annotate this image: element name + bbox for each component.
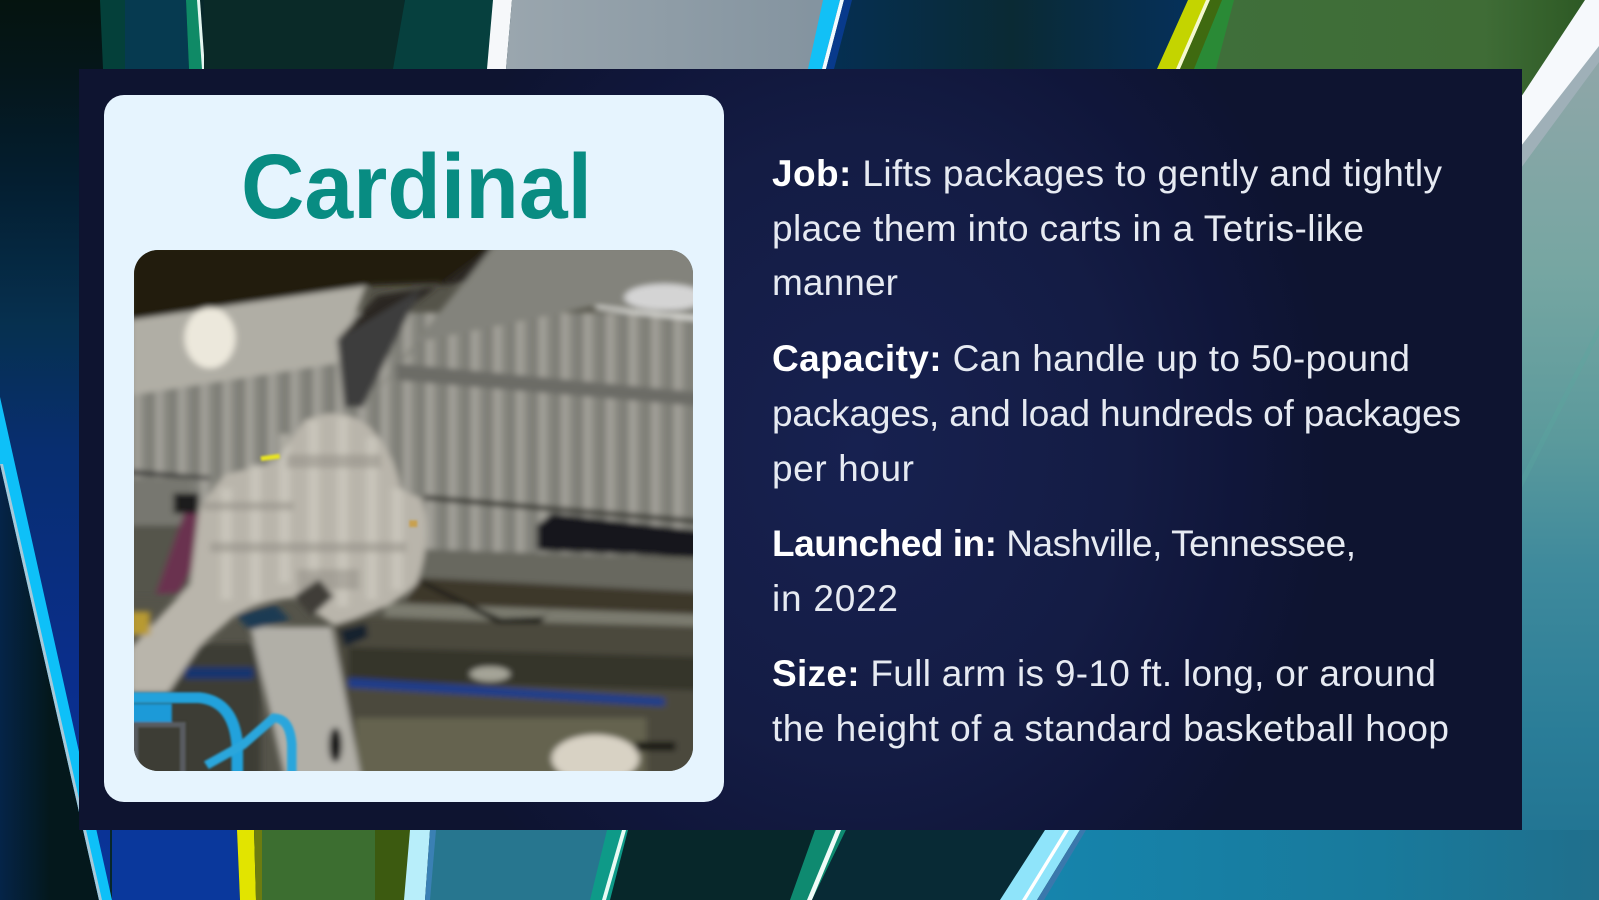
text block: robot facts	[772, 153, 1461, 749]
panel: dark content panel	[79, 69, 1522, 830]
launched in fact	[772, 523, 1356, 619]
size fact: the height of a standard basketball hoop	[772, 708, 1449, 749]
capacity fact: per hour	[772, 448, 914, 489]
capacity fact: packages, and load hundreds of packages	[772, 393, 1461, 434]
size fact: Size: Full arm is 9-10 ft. long, or around	[772, 653, 1436, 694]
title: Cardinal	[241, 136, 592, 238]
capacity fact	[772, 338, 1461, 489]
job fact: place them into carts in a Tetris-like	[772, 208, 1364, 249]
launched in fact: Launched in: Nashville, Tennessee,	[772, 523, 1356, 564]
job fact	[772, 153, 1442, 303]
capacity fact: Capacity: Can handle up to 50-pound	[772, 338, 1410, 379]
job fact: manner	[772, 262, 898, 303]
job fact: Job: Lifts packages to gently and tightly	[772, 153, 1442, 194]
size fact	[772, 653, 1449, 749]
launched in fact: in 2022	[772, 578, 898, 619]
photo: robotic arm in warehouse	[130, 245, 712, 785]
